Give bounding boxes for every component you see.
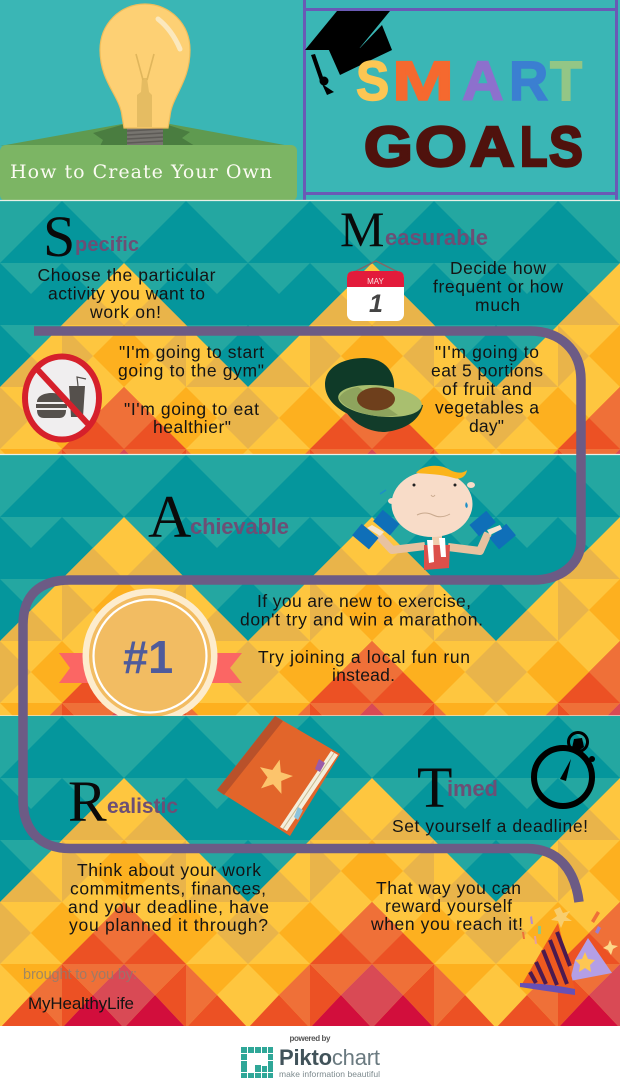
heading: Realistic: R: [68, 769, 107, 834]
banner: green label: [0, 145, 297, 201]
text: measurable examples: [431, 342, 543, 436]
title: GOALS: A: [470, 114, 514, 178]
title: SMART: S: [356, 50, 389, 113]
title: GOALS: L: [520, 115, 548, 178]
text: specific description: [38, 265, 216, 322]
connecting route line: [23, 331, 581, 902]
heading: Measurable: easurable: [385, 225, 488, 250]
header background: [0, 0, 620, 201]
text: specific examples: "I'm going to start: [119, 342, 264, 362]
text: achievable description: Try joining a local fun run: [258, 647, 470, 667]
text: specific description: Choose the particular: [38, 265, 216, 285]
title: SMART: [356, 49, 582, 113]
icon: calendar: 1: [369, 290, 383, 318]
title: GOALS: [364, 114, 583, 179]
icon: ground hill: [0, 124, 290, 146]
text: achievable description: instead.: [332, 665, 395, 685]
panel: achievable background: [0, 455, 620, 716]
text: measurable examples: "I'm going to: [435, 342, 539, 362]
text: Piktochart wordmark: Piktochart: [279, 1045, 380, 1070]
text: tagline: make information beautiful: [279, 1069, 380, 1079]
heading: Measurable: [340, 201, 488, 257]
text: MyHealthyLife: MyHealthyLife: [28, 994, 134, 1013]
heading: Specific: [43, 204, 139, 269]
text: timed description: when you reach it!: [370, 914, 523, 934]
title: SMART: T: [550, 50, 582, 112]
title: GOALS: G: [364, 115, 413, 178]
heading: Achievable: A: [148, 484, 191, 550]
icon: stopwatch: [534, 732, 595, 806]
icon: light bulb: [100, 4, 190, 145]
text: specific examples: going to the gym": [118, 360, 264, 380]
text: measurable examples: eat 5 portions: [431, 360, 543, 380]
text: timed description: That way you can: [376, 878, 521, 898]
text: measurable examples: of fruit and: [442, 379, 532, 399]
heading: Measurable: M: [340, 201, 384, 257]
title: SMART: A: [462, 51, 504, 113]
title: SMART: M: [392, 49, 454, 112]
panel: light bulb header: [0, 4, 297, 201]
text: achievable description: If you are new to exercise,: [257, 591, 471, 611]
heading: Achievable: chievable: [190, 514, 289, 539]
text: realistic description: Think about your work: [77, 860, 261, 880]
title: SMART: R: [509, 49, 548, 112]
text: brought to you by: brought to you by:: [23, 967, 137, 983]
heading: Realistic: ealistic: [107, 795, 178, 818]
text: realistic description: and your deadline, have: [68, 897, 269, 917]
icon: calendar: MAY: [367, 277, 385, 286]
panel: realistic and timed background: [0, 716, 620, 1026]
icon: party hats and confetti: [520, 907, 618, 995]
text: specific description: work on!: [89, 302, 161, 322]
icon: calendar: [347, 261, 404, 321]
heading: Realistic: [68, 769, 178, 834]
text: measurable examples: vegetables a: [435, 398, 539, 418]
heading: Specific: S: [43, 204, 75, 269]
title: GOALS: S: [549, 115, 583, 179]
text: measurable description: Decide how: [450, 258, 546, 278]
panel: specific and measurable background: [0, 201, 620, 455]
text: powered by: powered by: [290, 1034, 331, 1043]
text: measurable examples: day": [469, 416, 504, 436]
heading: Specific: pecific: [75, 234, 139, 256]
text: achievable description: don't try and win a marathon.: [240, 610, 483, 630]
text: measurable description: [433, 258, 563, 315]
text: timed description: [370, 878, 523, 934]
text: specific examples: "I'm going to eat: [124, 399, 259, 419]
heading: Achievable: [148, 484, 289, 550]
text: measurable description: frequent or how: [433, 276, 563, 296]
badge: number one: #1: [123, 632, 173, 683]
dividers: [0, 200, 620, 716]
footer: [0, 1026, 620, 1088]
text: realistic description: you planned it through?: [69, 915, 268, 935]
icon: boy lifting dumbbells: [352, 466, 516, 570]
text: timed line one: Set yourself a deadline!: [392, 816, 588, 836]
icon: graduation cap: [305, 11, 392, 95]
icon: no fast food sign: [25, 356, 99, 440]
badge: number one: [59, 588, 242, 724]
heading: Timed: T: [417, 755, 452, 820]
heading: Timed: [417, 755, 498, 820]
purple frame: [303, 0, 618, 200]
text: achievable description: [240, 591, 483, 685]
text: timed description: reward yourself: [385, 896, 512, 916]
panel: title frame: [303, 0, 618, 200]
text: specific description: activity you want to: [48, 284, 205, 304]
text: measurable description: much: [475, 295, 520, 315]
text: specific examples: healthier": [153, 417, 231, 437]
subtitle text: How to Create Your Own: [10, 161, 272, 183]
text: realistic description: commitments, finances,: [70, 878, 266, 898]
text: specific examples: [118, 342, 264, 437]
icon: orange book: [217, 716, 340, 836]
icon: avocado: [325, 358, 423, 432]
text: realistic description: [68, 860, 269, 935]
icon: Piktochart logo: [241, 1047, 273, 1078]
title: GOALS: O: [415, 115, 467, 179]
heading: Timed: imed: [447, 776, 498, 801]
